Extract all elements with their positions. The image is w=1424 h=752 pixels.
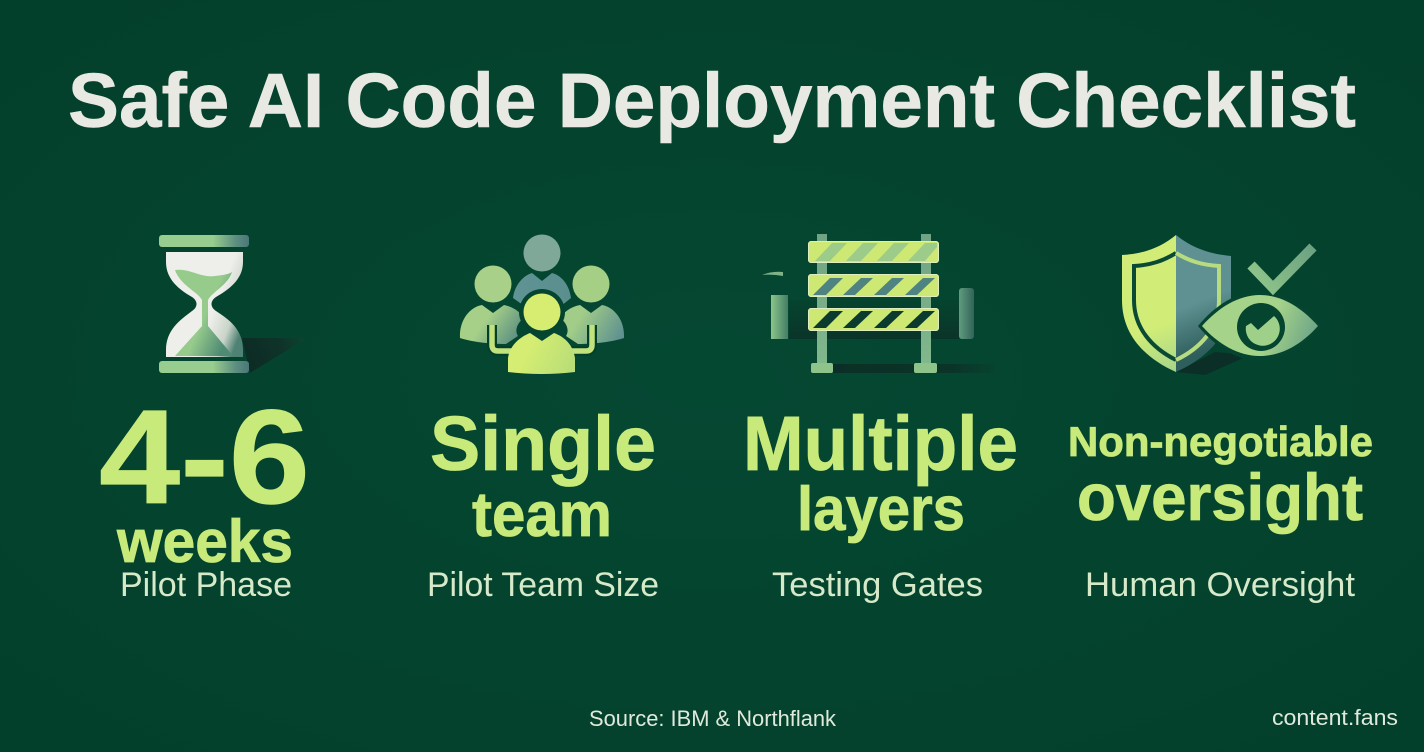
icon: shield with eye and check	[1122, 235, 1323, 375]
icon: team of people	[460, 234, 624, 374]
panel: pilot team size	[427, 234, 659, 604]
stat: 4-6: 4-6	[99, 383, 310, 532]
stat: multiple: Multiple	[743, 401, 1018, 487]
panel: pilot phase	[99, 235, 310, 604]
title: Safe AI Code Deployment Checklist	[68, 58, 1356, 144]
brand credit: content.fans	[1272, 705, 1398, 730]
label: pilot phase: Pilot Phase	[120, 566, 292, 604]
stat: layers: layers	[797, 475, 965, 544]
label: human oversight: Human Oversight	[1085, 566, 1356, 604]
icon: striped barrier	[762, 234, 995, 373]
stat: single: Single	[430, 401, 656, 487]
panel: human oversight	[1068, 235, 1373, 604]
label: pilot team size: Pilot Team Size	[427, 566, 659, 604]
stat unit: weeks: weeks	[116, 508, 293, 575]
stat: non-negotiable: Non-negotiable	[1068, 418, 1373, 465]
icon: hourglass	[159, 235, 307, 373]
stat: oversight: oversight	[1077, 460, 1363, 534]
stat: team: team	[472, 480, 612, 550]
source credit: Source: IBM & Northflank	[589, 706, 837, 731]
label: testing gates: Testing Gates	[772, 566, 983, 604]
panel: testing gates	[743, 234, 1018, 604]
